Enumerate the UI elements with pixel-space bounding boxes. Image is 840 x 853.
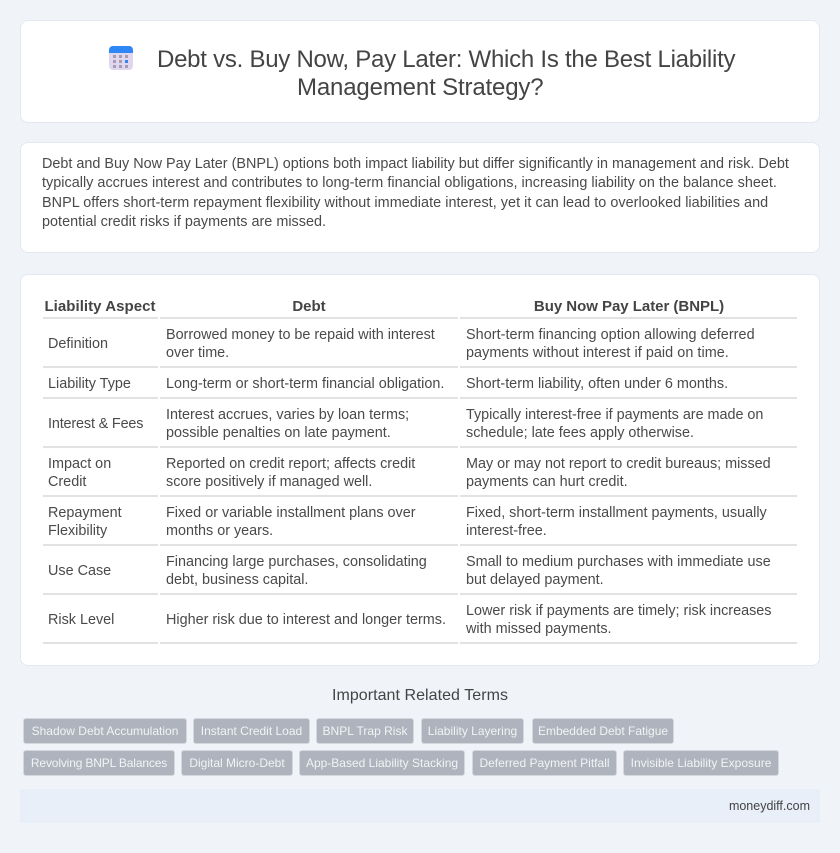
row: definition: over time. <box>166 345 229 361</box>
intro text: BNPL offers short-term repayment flexibility without immediate interest, yet it can lead to overlooked liabilities and <box>42 195 768 211</box>
related terms tags: App-Based Liability Stacking <box>306 756 458 770</box>
related terms tags: Invisible Liability Exposure <box>631 756 771 770</box>
table header: Debt <box>292 298 326 315</box>
table header: Buy Now Pay Later (BNPL) <box>534 298 724 315</box>
row: impact on credit: payments can hurt credit. <box>466 474 628 490</box>
row: definition: Definition <box>48 336 108 352</box>
related terms tags <box>23 718 779 776</box>
title <box>157 46 736 101</box>
row: use case <box>48 554 771 588</box>
row: use case: Financing large purchases, consolidating <box>166 554 427 570</box>
table header <box>44 298 724 315</box>
row: definition <box>48 327 755 361</box>
row: interest and fees <box>48 407 763 441</box>
panel: introduction <box>20 142 820 253</box>
row: repayment flexibility: Fixed, short-term installment payments, usually <box>466 505 767 521</box>
row: risk level <box>48 603 772 637</box>
related terms tags: Instant Credit Load <box>201 724 302 738</box>
row: impact on credit: score positively if managed well. <box>166 474 372 490</box>
row: interest and fees: possible penalties on late payment. <box>166 425 391 441</box>
row: liability type: Long-term or short-term financial obligation. <box>166 376 444 392</box>
row: liability type <box>48 376 728 392</box>
row: impact on credit: Reported on credit report; affects credit <box>166 456 415 472</box>
related terms tags: Digital Micro-Debt <box>189 756 285 770</box>
row: repayment flexibility: Repayment <box>48 505 122 521</box>
related terms tags: BNPL Trap Risk <box>323 724 407 738</box>
row: impact on credit: Impact on <box>48 456 111 472</box>
row: repayment flexibility <box>48 505 767 539</box>
row: liability type: Liability Type <box>48 376 131 392</box>
row: liability type: Short-term liability, often under 6 months. <box>466 376 728 392</box>
row: repayment flexibility: Fixed or variable installment plans over <box>166 505 416 521</box>
row: impact on credit: May or may not report to credit bureaus; missed <box>466 456 771 472</box>
intro text: typically accrues interest and contributes to long-term financial obligations, increasing liability on the balance sheet. <box>42 175 777 191</box>
related terms tags: Revolving BNPL Balances <box>31 756 167 770</box>
row: risk level: Higher risk due to interest and longer terms. <box>166 612 446 628</box>
related terms heading: Important Related Terms <box>332 687 508 704</box>
row: interest and fees: Typically interest-free if payments are made on <box>466 407 763 423</box>
row: use case: but delayed payment. <box>466 572 604 588</box>
row: repayment flexibility: Flexibility <box>48 523 107 539</box>
row: use case: debt, business capital. <box>166 572 308 588</box>
row: definition: Short-term financing option allowing deferred <box>466 327 755 343</box>
related terms tags: Liability Layering <box>428 724 517 738</box>
row: impact on credit <box>48 456 771 490</box>
row: definition: Borrowed money to be repaid with interest <box>166 327 435 343</box>
row: risk level: Lower risk if payments are timely; risk increases <box>466 603 772 619</box>
row: interest and fees: Interest accrues, varies by loan terms; <box>166 407 409 423</box>
footer source: moneydiff.com <box>729 799 810 813</box>
related terms tags: Shadow Debt Accumulation <box>32 724 178 738</box>
related terms tags: Deferred Payment Pitfall <box>479 756 610 770</box>
footer <box>20 789 820 823</box>
row: risk level: Risk Level <box>48 612 114 628</box>
row: risk level: with missed payments. <box>466 621 612 637</box>
row: interest and fees: schedule; late fees apply otherwise. <box>466 425 694 441</box>
intro text: Debt and Buy Now Pay Later (BNPL) options both impact liability but differ significantly in management and risk. Debt <box>42 156 789 172</box>
intro text: potential credit risks if payments are missed. <box>42 214 326 230</box>
panel: comparison table <box>20 274 820 666</box>
title: Management Strategy? <box>297 74 543 101</box>
icon: calendar <box>109 46 133 70</box>
row: repayment flexibility: months or years. <box>166 523 273 539</box>
row: repayment flexibility: interest-free. <box>466 523 547 539</box>
row: definition: payments without interest if paid on time. <box>466 345 729 361</box>
intro text <box>42 156 789 230</box>
row: impact on credit: Credit <box>48 474 86 490</box>
title: Debt vs. Buy Now, Pay Later: Which Is the Best Liability <box>157 46 735 73</box>
row: use case: Small to medium purchases with immediate use <box>466 554 771 570</box>
related terms tags: Embedded Debt Fatigue <box>538 724 668 738</box>
row: use case: Use Case <box>48 563 111 579</box>
panel: header <box>20 20 820 123</box>
table header: Liability Aspect <box>44 298 156 315</box>
row: interest and fees: Interest & Fees <box>48 416 143 432</box>
